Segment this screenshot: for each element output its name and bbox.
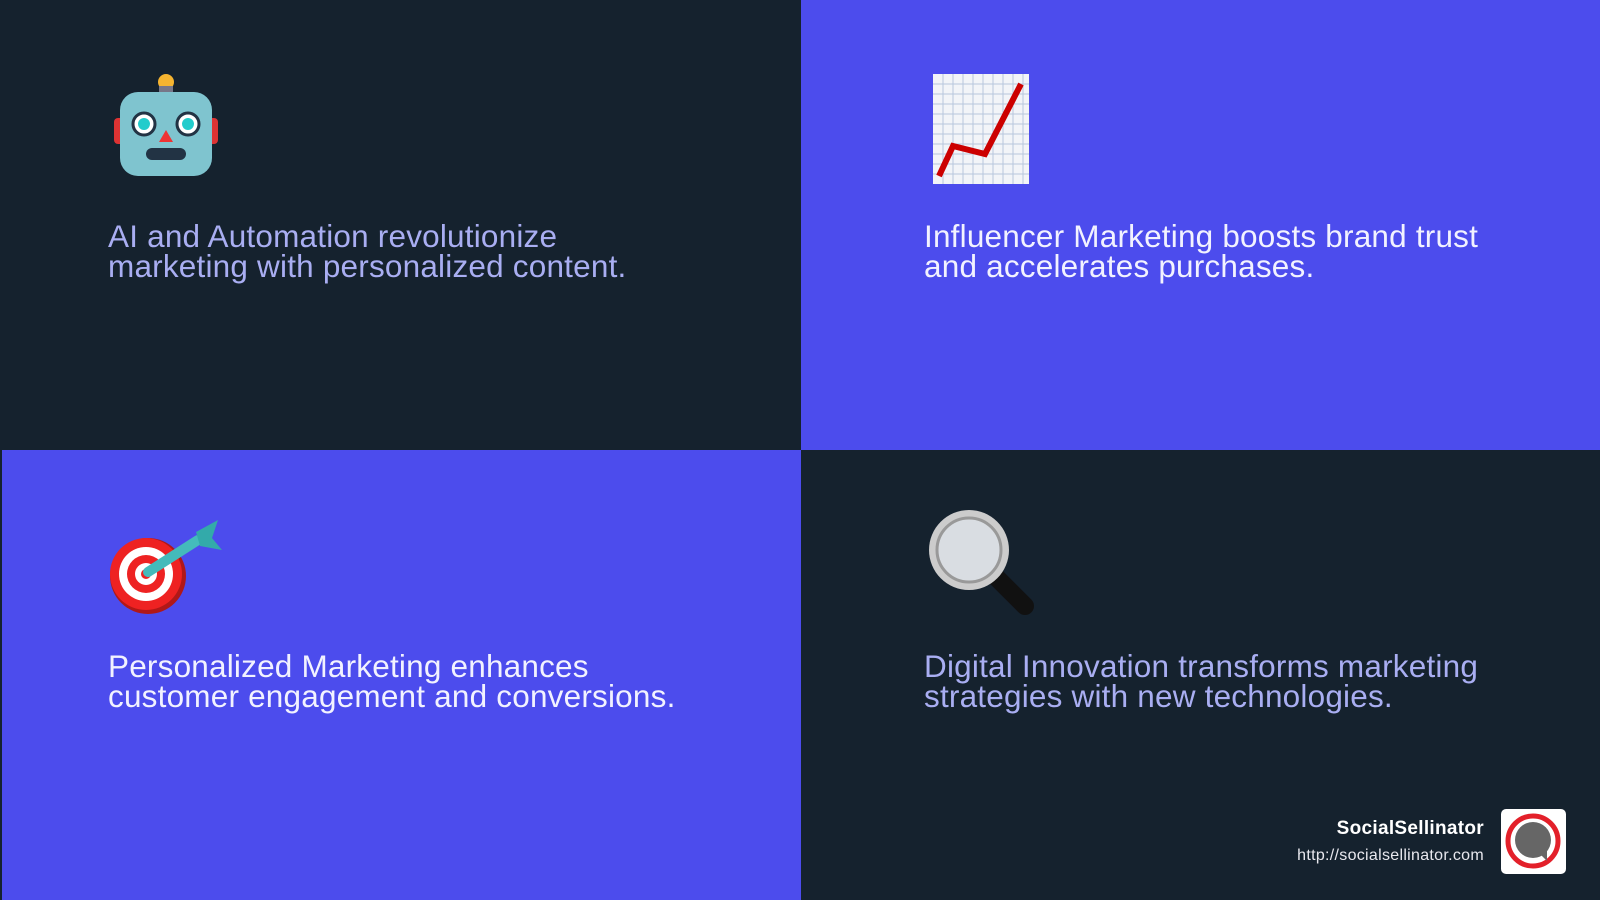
brand: SocialSellinator: SocialSellinator (1337, 818, 1484, 839)
text: Digital Innovation: strategies with new technologies. (924, 678, 1393, 714)
panel: AI and automation (2, 0, 801, 450)
panel: personalized marketing (2, 450, 801, 900)
text: Digital Innovation: Digital Innovation transforms marketing (924, 648, 1478, 684)
text: Influencer Marketing: and accelerates purchases. (924, 248, 1314, 284)
text: Personalized Marketing: customer engagement and conversions. (108, 678, 676, 714)
icon: robot (114, 74, 218, 176)
text: Influencer Marketing: Influencer Marketing boosts brand trust (924, 218, 1478, 254)
text: AI and Automation: marketing with personalized content. (108, 248, 626, 284)
icon: chart (933, 74, 1029, 184)
text: Influencer Marketing (924, 218, 1478, 284)
panel: influencer marketing (801, 0, 1600, 450)
text: AI and Automation: AI and Automation revolutionize (108, 218, 557, 254)
brand: SocialSellinator (1297, 818, 1484, 864)
text: Personalized Marketing: Personalized Marketing enhances (108, 648, 589, 684)
brand: SocialSellinator: http://socialsellinator.com (1297, 847, 1484, 864)
text: AI and Automation (108, 218, 626, 284)
text: Digital Innovation (924, 648, 1478, 714)
icon: magnifying glass (929, 510, 1034, 615)
logo (1501, 809, 1566, 874)
text: Personalized Marketing (108, 648, 676, 714)
icon: target with dart (110, 520, 222, 614)
panel: digital innovation (801, 450, 1600, 900)
